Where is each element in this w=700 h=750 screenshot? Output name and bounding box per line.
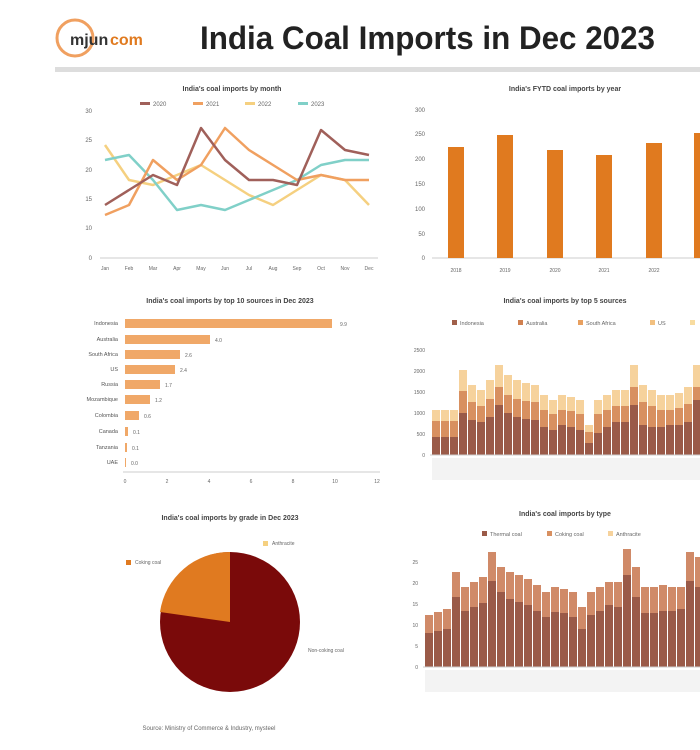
panel: stacked bars by source: India's coal imports by top 5 sources — [503, 298, 627, 305]
panel: line chart by month: Jan — [101, 266, 109, 272]
panel: line chart by month — [85, 86, 378, 272]
panel: line chart by month: Jun — [221, 266, 229, 272]
panel: line chart by month: Feb — [125, 266, 134, 272]
panel: line chart by month: Mar — [149, 266, 158, 272]
panel: top 10 sources: Indonesia — [94, 321, 119, 327]
panel: line chart by month: Oct — [317, 266, 325, 272]
panel: top 10 sources: 2.6 — [185, 353, 192, 359]
panel: line chart by month: Dec — [365, 266, 374, 272]
panel: top 10 sources: US — [110, 367, 118, 373]
panel: FYTD bars: 2021 — [598, 268, 610, 274]
panel: stacked by type: Thermal coal — [490, 532, 522, 538]
panel: line chart by month: India's coal imports by month — [183, 86, 281, 93]
panel: top 10 sources: Russia — [101, 382, 119, 388]
panel: stacked by type: Anthracite — [616, 532, 641, 538]
panel: line chart by month: Aug — [269, 266, 278, 272]
panel: top 10 sources: 0.1 — [132, 446, 139, 452]
panel: line chart by month: 30 — [85, 109, 93, 115]
header logo — [57, 20, 143, 56]
panel: line chart by month: 0 — [89, 256, 93, 262]
panel: stacked by type: Coking coal — [555, 532, 584, 538]
header logo: com — [110, 32, 143, 49]
panel: FYTD bars: 200 — [415, 157, 426, 163]
panel: line chart by month: Jul — [246, 266, 252, 272]
panel: line chart by month: May — [196, 266, 206, 272]
panel: line chart by month: 2023 — [311, 102, 325, 108]
panel: stacked bars by source: 1000 — [414, 411, 425, 417]
panel: top 10 sources: 10 — [332, 479, 338, 485]
panel: top 10 sources: 2 — [166, 479, 169, 485]
panel: top 10 sources: 4.0 — [215, 338, 222, 344]
panel: top 10 sources: 0 — [124, 479, 127, 485]
panel: stacked bars by source — [414, 298, 700, 480]
panel: stacked by type: 10 — [412, 623, 418, 629]
panel: top 10 sources: 1.2 — [155, 398, 162, 404]
panel: line chart by month: 2020 — [153, 102, 167, 108]
panel: line chart by month: 10 — [85, 226, 93, 232]
panel: line chart by month: 20 — [85, 168, 93, 174]
panel: FYTD bars: India's FYTD coal imports by year — [509, 86, 621, 93]
panel: stacked by type: 5 — [415, 644, 418, 650]
panel: stacked by type: 20 — [412, 581, 418, 587]
panel: top 10 sources: Australia — [97, 337, 119, 343]
panel: top 10 sources: Colombia — [95, 413, 119, 419]
panel: top 10 sources: Canada — [99, 429, 119, 435]
panel: top 10 sources: 9.9 — [340, 322, 347, 328]
panel: FYTD bars: 50 — [418, 232, 426, 238]
panel: stacked bars by source: 500 — [417, 432, 425, 438]
panel: FYTD bars: 100 — [415, 207, 426, 213]
panel: pie by grade: Coking coal — [135, 560, 161, 566]
panel: line chart by month: 15 — [85, 197, 93, 203]
panel: top 10 sources — [86, 298, 380, 485]
panel: stacked bars by source: Indonesia — [460, 321, 485, 327]
panel: stacked bars by source: Australia — [526, 321, 548, 327]
title: India Coal Imports in Dec 2023 — [200, 20, 655, 56]
panel: FYTD bars: 150 — [415, 182, 426, 188]
panel: FYTD bars: 2018 — [450, 268, 462, 274]
panel: top 10 sources: 6 — [250, 479, 253, 485]
panel: top 10 sources: UAE — [107, 460, 118, 466]
panel: line chart by month: 25 — [85, 138, 93, 144]
panel: top 10 sources: India's coal imports by top 10 sources in Dec 2023 — [146, 298, 314, 305]
panel: stacked by type: India's coal imports by type — [519, 511, 611, 518]
panel: stacked by type: 0 — [415, 665, 418, 671]
panel: stacked by type: 25 — [412, 560, 418, 566]
panel: top 10 sources: South Africa — [88, 352, 119, 358]
header logo: mjun — [70, 32, 108, 49]
panel: stacked by type: 15 — [412, 602, 418, 608]
panel: FYTD bars — [415, 86, 700, 274]
panel: pie by grade: Non-coking coal — [308, 648, 344, 654]
panel: line chart by month: Apr — [173, 266, 181, 272]
panel: stacked bars by source: 1500 — [414, 390, 425, 396]
panel: stacked bars by source: 2000 — [414, 369, 425, 375]
panel: top 10 sources: Mozambique — [86, 397, 118, 403]
panel: top 10 sources: 8 — [292, 479, 295, 485]
panel: FYTD bars: 250 — [415, 132, 426, 138]
panel: stacked bars by source: 2500 — [414, 348, 425, 354]
panel: FYTD bars: 2022 — [648, 268, 660, 274]
panel: stacked bars by source: 0 — [422, 453, 425, 459]
panel: top 10 sources: 4 — [208, 479, 211, 485]
panel: stacked bars by source: US — [658, 321, 666, 327]
panel: top 10 sources: 0.6 — [144, 414, 151, 420]
panel: FYTD bars: 300 — [415, 108, 426, 114]
source note: Source: Ministry of Commerce & Industry, mysteel — [143, 726, 275, 732]
panel: pie by grade — [126, 515, 344, 692]
panel: top 10 sources: 1.7 — [165, 383, 172, 389]
panel: FYTD bars: 0 — [422, 256, 426, 262]
panel: top 10 sources: 0.1 — [133, 430, 140, 436]
panel: line chart by month: 2022 — [258, 102, 272, 108]
panel: top 10 sources: 2.4 — [180, 368, 187, 374]
panel: top 10 sources: 12 — [374, 479, 380, 485]
panel: pie by grade: Anthracite — [272, 541, 295, 547]
panel: line chart by month: Sep — [293, 266, 302, 272]
panel: line chart by month: Nov — [341, 266, 350, 272]
panel: stacked by type — [412, 511, 700, 692]
panel: stacked bars by source: South Africa — [586, 321, 617, 327]
panel: top 10 sources: Tanzania — [96, 445, 119, 451]
panel: pie by grade: India's coal imports by grade in Dec 2023 — [161, 515, 299, 522]
panel: FYTD bars: 2019 — [499, 268, 511, 274]
panel: line chart by month: 2021 — [206, 102, 220, 108]
panel: FYTD bars: 2020 — [549, 268, 561, 274]
panel: top 10 sources: 0.0 — [131, 461, 138, 467]
